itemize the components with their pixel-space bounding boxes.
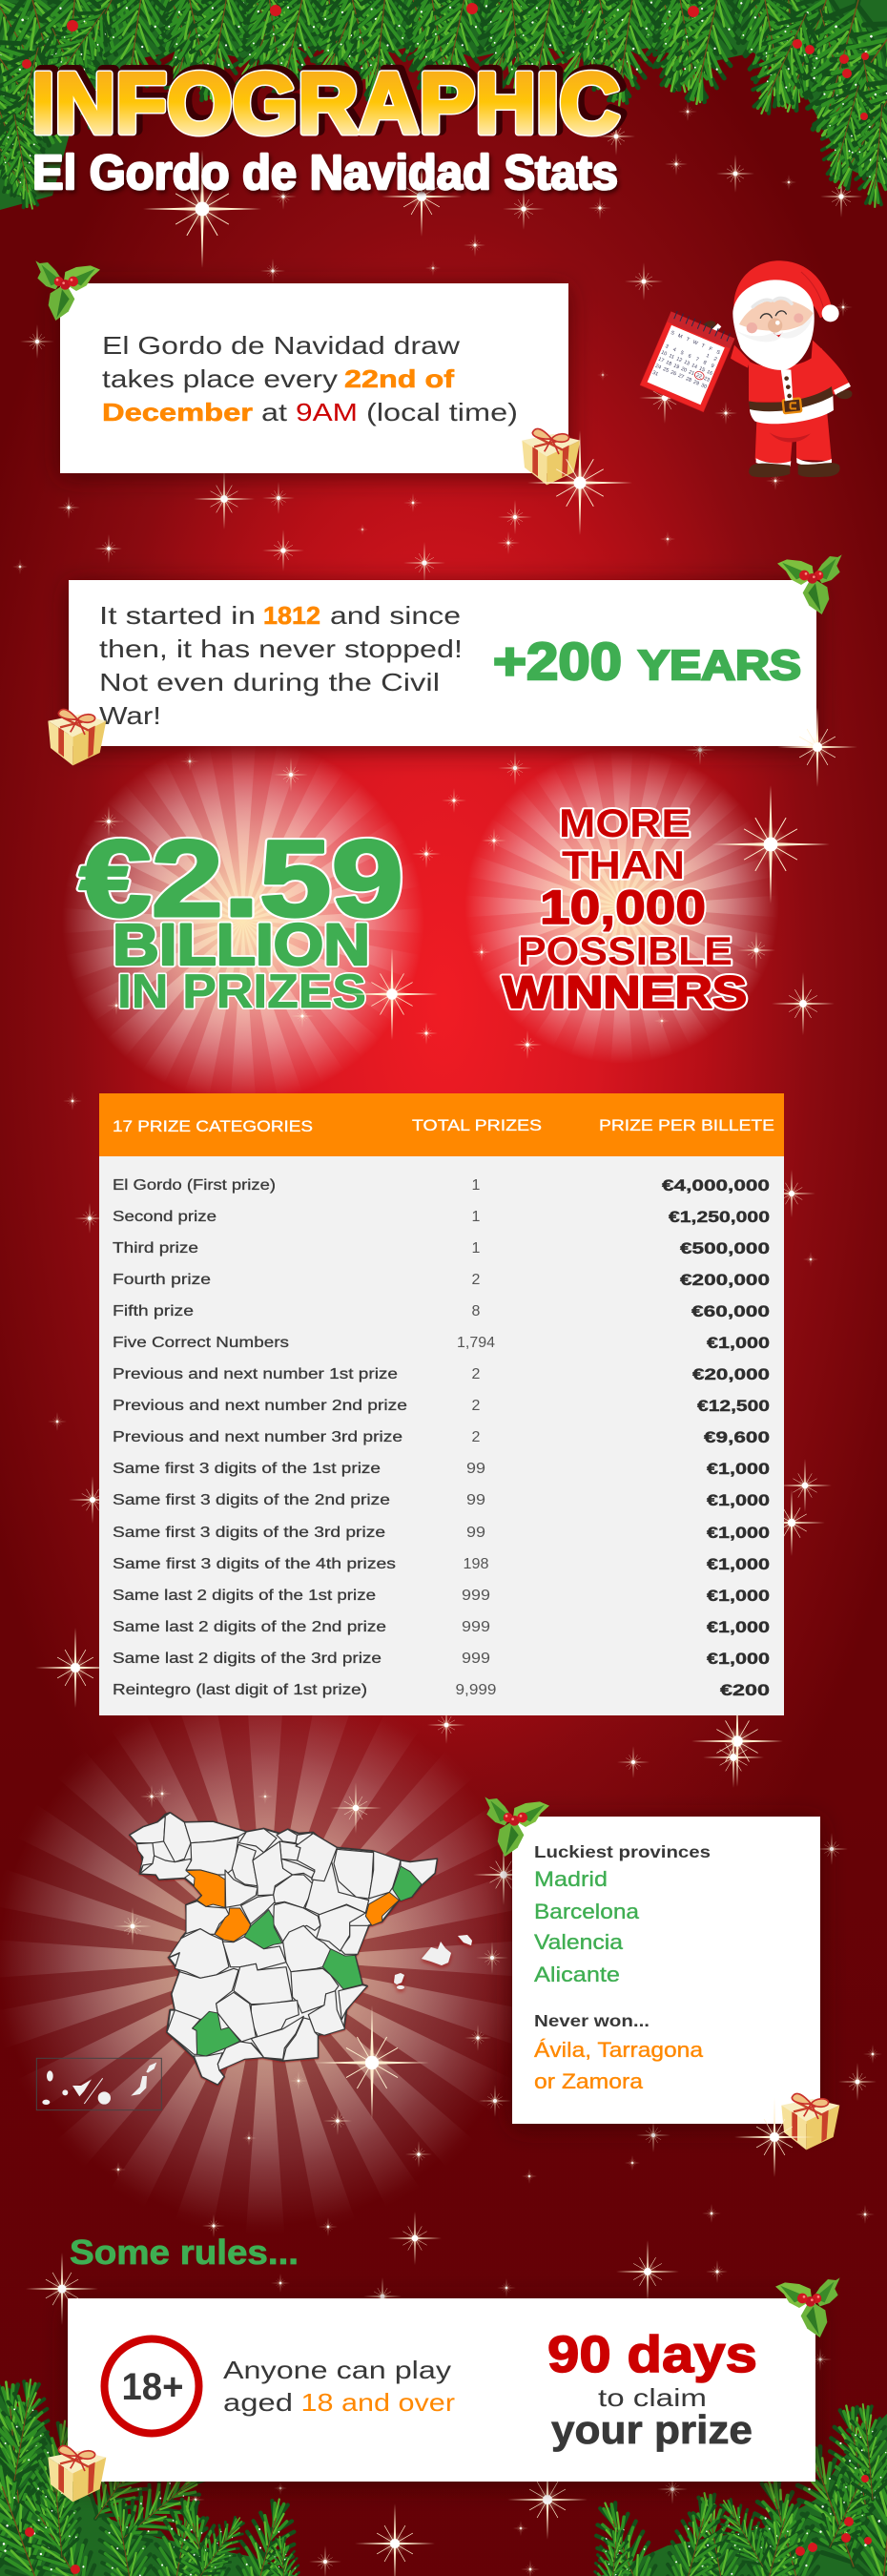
- row: Reintegro: [113, 1681, 770, 1699]
- panel: history: [69, 580, 816, 746]
- panel: history: It started in: [99, 601, 256, 630]
- illustration: Santa holding a calendar: 31: [651, 370, 659, 378]
- illustration: Santa holding a calendar: 27: [677, 373, 685, 381]
- panel: draw date: at: [261, 398, 288, 426]
- panel: provinces: Alicante: [534, 1963, 620, 1986]
- row: Five Correct Numbers: 1,794: [457, 1335, 495, 1351]
- panel: draw date: 22nd of: [344, 364, 454, 393]
- panel: provinces: Madrid: [534, 1867, 608, 1891]
- illustration: Santa holding a calendar: 8: [702, 360, 707, 366]
- illustration: Santa holding a calendar: 1: [705, 353, 710, 360]
- panel: draw date: 9AM: [296, 398, 358, 426]
- illustration: Santa holding a calendar: 22: [695, 373, 703, 381]
- foreground sparkles: [315, 430, 857, 2177]
- panel: provinces: Valencia: [534, 1930, 624, 1954]
- row: same first 3 digits 2nd: €1,000: [707, 1491, 770, 1509]
- row: Five Correct Numbers: Five Correct Numbers: [113, 1335, 289, 1351]
- icon: gift on provinces panel: [781, 2093, 839, 2150]
- illustration: Santa holding a calendar: 7: [694, 357, 699, 363]
- illustration: Santa holding a calendar: 5: [679, 350, 685, 357]
- row: same first 3 digits 3rd: [113, 1524, 770, 1542]
- row: same first 3 digits 2nd: 99: [466, 1492, 485, 1508]
- row: same first 3 digits 4th: 198: [464, 1556, 489, 1572]
- stat: possible winners: WINNERS: [503, 966, 747, 1017]
- table body panel: [99, 1156, 784, 1715]
- stat: possible winners: MORE: [559, 800, 691, 845]
- never won: Tarragona: [365, 1892, 399, 1925]
- illustration: Santa holding a calendar: 12: [675, 356, 683, 364]
- stat: prize amount: BILLION: [113, 912, 370, 977]
- glow with rays behind map: [0, 1682, 542, 2235]
- icon: holly on provinces panel: [485, 1797, 549, 1857]
- row: previous and next 3rd: 2: [472, 1429, 481, 1445]
- glow with rays behind possible winners: [464, 749, 779, 1064]
- row: Third prize: 1: [472, 1240, 481, 1257]
- row: previous and next 2nd: €12,500: [697, 1397, 770, 1415]
- row: previous and next 3rd: Previous and next number 3rd prize: [113, 1429, 402, 1445]
- illustration: Santa holding a calendar: 16: [706, 369, 713, 377]
- row: same last 2 digits 3rd: €1,000: [707, 1650, 770, 1668]
- panel: history: War!: [99, 701, 161, 730]
- panel: draw date: December: [102, 398, 253, 426]
- stat: possible winners: THAN: [562, 842, 685, 887]
- row: Second prize: €1,250,000: [669, 1208, 770, 1226]
- row: same first 3 digits 1st: 99: [466, 1461, 485, 1477]
- row: same first 3 digits 2nd: [113, 1491, 770, 1509]
- claim rule text: 90 days: [547, 2326, 757, 2383]
- illustration: Santa holding a calendar: 14: [691, 363, 698, 370]
- icon: gift on rules panel: [48, 2445, 106, 2502]
- stat: possible winners: 10,000: [540, 881, 706, 934]
- row: previous and next 3rd: €9,600: [704, 1428, 770, 1446]
- illustration: Santa holding a calendar: 20: [680, 366, 688, 374]
- illustration: Santa holding a calendar: 19: [672, 364, 680, 370]
- illustration: Santa holding a calendar: 29: [692, 380, 700, 387]
- row: same last 2 digits 1st: Same last 2 digits of the 1st prize: [113, 1588, 376, 1604]
- panel: history: 1812: [263, 601, 320, 630]
- table header: [99, 1093, 784, 1156]
- stat: prize amount: [79, 819, 403, 1018]
- luckiest: Barcelona: [393, 1866, 422, 1901]
- stat: possible winners: POSSIBLE: [518, 928, 732, 973]
- row: Fifth prize: [113, 1302, 770, 1320]
- age rule text: aged: [223, 2388, 293, 2417]
- row: same last 2 digits 2nd: Same last 2 digits of the 2nd prize: [113, 1619, 386, 1635]
- row: Reintegro: Reintegro (last digit of 1st prize): [113, 1682, 367, 1698]
- row: Fourth prize: €200,000: [680, 1271, 770, 1289]
- panel: draw date: (local time): [366, 398, 518, 426]
- Canary islands inset: [36, 2058, 161, 2110]
- icon: gift on history panel: [48, 709, 106, 765]
- illustration: Santa holding a calendar: 13: [683, 360, 691, 367]
- panel: provinces: or Zamora: [534, 2069, 644, 2093]
- table header: TOTAL PRIZES: [412, 1116, 542, 1134]
- panel: rules: [68, 2298, 815, 2482]
- row: Reintegro: 9,999: [456, 1682, 497, 1698]
- panel: provinces: Ávila, Tarragona: [534, 2038, 704, 2062]
- illustration: Santa holding a calendar: 3: [664, 343, 670, 350]
- panel: history: Not even during the Civil: [99, 668, 440, 696]
- row: Fifth prize: Fifth prize: [113, 1303, 194, 1319]
- row: Second prize: [113, 1208, 770, 1226]
- row: Fourth prize: Fourth prize: [113, 1272, 211, 1288]
- claim rule text: your prize: [551, 2407, 753, 2452]
- never won: Zamora: [186, 1870, 225, 1907]
- map of Spain: [130, 1813, 437, 2085]
- row: same first 3 digits 1st: €1,000: [707, 1460, 770, 1478]
- stat: possible winners: [503, 800, 747, 1017]
- panel: history: +200: [493, 632, 622, 691]
- illustration: Santa holding a calendar: S: [670, 330, 675, 337]
- illustration: Santa holding a calendar: 21: [688, 369, 695, 377]
- illustration: Santa holding a calendar: 30: [700, 383, 708, 390]
- row: Third prize: [113, 1239, 770, 1257]
- table header: PRIZE PER BILLETE: [599, 1116, 774, 1134]
- row: previous and next 1st: [113, 1365, 770, 1383]
- illustration: Santa holding a calendar: 18: [665, 360, 672, 367]
- illustration: Santa holding a calendar: 24: [654, 364, 662, 371]
- row: same last 2 digits 3rd: Same last 2 digits of the 3rd prize: [113, 1651, 382, 1667]
- row: same last 2 digits 3rd: 999: [462, 1651, 490, 1667]
- illustration: Santa holding a calendar: [640, 260, 852, 477]
- icon: 18+ badge: 18+: [122, 2366, 183, 2408]
- icon: holly on rules panel: [775, 2277, 840, 2337]
- stat: possible winners: THAN: [562, 842, 685, 887]
- illustration: Santa holding a calendar: 28: [685, 376, 692, 384]
- row: same last 2 digits 2nd: €1,000: [707, 1618, 770, 1636]
- age rule text: Anyone can play: [223, 2356, 451, 2384]
- top pine garland: [0, 0, 887, 213]
- row: Five Correct Numbers: [113, 1334, 770, 1352]
- illustration: Santa holding a calendar: 15: [698, 366, 706, 373]
- illustration: Santa holding a calendar: T: [700, 343, 706, 350]
- claim rule text: to claim: [598, 2383, 707, 2412]
- row: same first 3 digits 2nd: Same first 3 digits of the 2nd prize: [113, 1492, 390, 1508]
- table header: 17 PRIZE CATEGORIES: [113, 1117, 313, 1135]
- row: same last 2 digits 1st: €1,000: [707, 1587, 770, 1605]
- illustration: Santa holding a calendar: 10: [660, 350, 668, 358]
- row: same last 2 digits 3rd: [113, 1650, 770, 1668]
- illustration: Santa holding a calendar: 25: [662, 366, 670, 374]
- icon: 18+ badge: [105, 2339, 198, 2433]
- row: same first 3 digits 3rd: €1,000: [707, 1524, 770, 1542]
- row: previous and next 2nd: [113, 1397, 770, 1415]
- row: same last 2 digits 2nd: 999: [462, 1619, 490, 1635]
- row: El Gordo: El Gordo (First prize): [113, 1177, 276, 1194]
- panel: provinces: Never won...: [534, 2011, 650, 2030]
- row: same last 2 digits 2nd: [113, 1618, 770, 1636]
- row: previous and next 1st: €20,000: [692, 1365, 770, 1383]
- panel: draw date: takes place every: [102, 364, 338, 393]
- stat: prize amount: IN PRIZES: [117, 965, 366, 1018]
- row: same last 2 digits 1st: 999: [462, 1588, 490, 1604]
- row: Fourth prize: [113, 1271, 770, 1289]
- illustration: Santa holding a calendar: 11: [668, 353, 675, 361]
- illustration: Santa holding a calendar: 6: [687, 353, 692, 360]
- row: same first 3 digits 3rd: 99: [466, 1525, 485, 1541]
- illustration: Santa holding a calendar: T: [685, 337, 691, 343]
- row: same first 3 digits 1st: [113, 1460, 770, 1478]
- row: same last 2 digits 1st: [113, 1587, 770, 1605]
- panel: provinces: Barcelona: [534, 1900, 640, 1923]
- row: same first 3 digits 3rd: Same first 3 digits of the 3rd prize: [113, 1525, 385, 1541]
- row: Second prize: Second prize: [113, 1209, 217, 1225]
- illustration: Santa holding a calendar: 26: [670, 370, 677, 377]
- age rule text: [223, 2356, 455, 2417]
- illustration: Santa holding a calendar: M: [677, 333, 683, 340]
- row: Five Correct Numbers: €1,000: [707, 1334, 770, 1352]
- stat: prize amount: IN PRIZES: [117, 965, 366, 1018]
- prize categories table: [99, 1093, 784, 1715]
- stat: prize amount: BILLION: [113, 912, 370, 977]
- luckiest: Madrid: [244, 1910, 282, 1949]
- illustration: Santa holding a calendar: 23: [703, 376, 711, 384]
- never won: Ávila: [215, 1908, 251, 1942]
- row: Fifth prize: 8: [472, 1303, 481, 1319]
- row: previous and next 1st: Previous and next number 1st prize: [113, 1366, 398, 1382]
- row: Reintegro: €200: [720, 1681, 770, 1699]
- illustration: Santa holding a calendar: 9: [710, 364, 714, 369]
- panel: history: and since: [330, 601, 461, 630]
- stat: prize amount: €2.59: [79, 819, 403, 940]
- row: same first 3 digits 4th: €1,000: [707, 1555, 770, 1573]
- row: previous and next 3rd: [113, 1428, 770, 1446]
- stat: possible winners: MORE: [559, 800, 691, 845]
- glow with rays behind prize amount: [62, 739, 424, 1102]
- panel: history: then, it has never stopped!: [99, 634, 463, 663]
- luckiest: Alicante: [193, 2011, 240, 2056]
- panel: provinces: [512, 1817, 820, 2124]
- title: INFOGRAPHIC: [31, 56, 620, 152]
- row: Third prize: Third prize: [113, 1240, 198, 1257]
- row: El Gordo: [113, 1176, 770, 1195]
- icon: gift on draw date panel: [522, 428, 580, 485]
- illustration: Santa holding a calendar: 4: [671, 347, 677, 353]
- title: INFOGRAPHIC: [31, 56, 620, 152]
- illustration: Santa holding a calendar: W: [691, 340, 699, 347]
- subtitle: El Gordo de Navidad Stats: [32, 145, 618, 199]
- bottom pine garland: [0, 2376, 887, 2576]
- title: INFOGRAPHIC: [35, 53, 624, 149]
- stat: possible winners: POSSIBLE: [518, 928, 732, 973]
- heading: some rules: Some rules...: [70, 2233, 299, 2272]
- row: El Gordo: €4,000,000: [662, 1176, 770, 1195]
- stat: possible winners: WINNERS: [503, 966, 747, 1017]
- stat: prize amount: €2.59: [79, 819, 403, 940]
- row: same first 3 digits 4th: Same first 3 digits of the 4th prizes: [113, 1556, 396, 1572]
- row: Fifth prize: €60,000: [691, 1302, 770, 1320]
- illustration: Santa holding a calendar: 2: [712, 356, 717, 363]
- icon: holly on history panel: [777, 554, 842, 614]
- luckiest: Valencia: [322, 1949, 362, 1989]
- row: same first 3 digits 1st: Same first 3 digits of the 1st prize: [113, 1461, 381, 1477]
- claim rule text: [547, 2326, 757, 2452]
- stat: possible winners: 10,000: [540, 881, 706, 934]
- row: previous and next 1st: 2: [472, 1366, 481, 1382]
- row: Fourth prize: 2: [472, 1272, 481, 1288]
- illustration: Santa holding a calendar: F: [708, 346, 713, 353]
- row: Second prize: 1: [472, 1209, 481, 1225]
- age rule text: 18 and over: [301, 2388, 455, 2417]
- panel: provinces: Luckiest provinces: [534, 1842, 711, 1861]
- row: El Gordo: 1: [472, 1177, 481, 1194]
- icon: holly on draw date panel: [35, 260, 100, 321]
- row: previous and next 2nd: 2: [472, 1398, 481, 1414]
- illustration: Santa holding a calendar: S: [715, 349, 721, 356]
- panel: draw date: [60, 283, 568, 473]
- panel: history: YEARS: [638, 642, 801, 689]
- row: same first 3 digits 4th: [113, 1555, 770, 1573]
- illustration: Santa holding a calendar: 17: [657, 357, 665, 364]
- row: Third prize: €500,000: [680, 1239, 770, 1257]
- Balearic islands: [394, 1935, 472, 1989]
- row: previous and next 2nd: Previous and next number 2nd prize: [113, 1398, 407, 1414]
- panel: draw date: El Gordo de Navidad draw: [102, 331, 460, 360]
